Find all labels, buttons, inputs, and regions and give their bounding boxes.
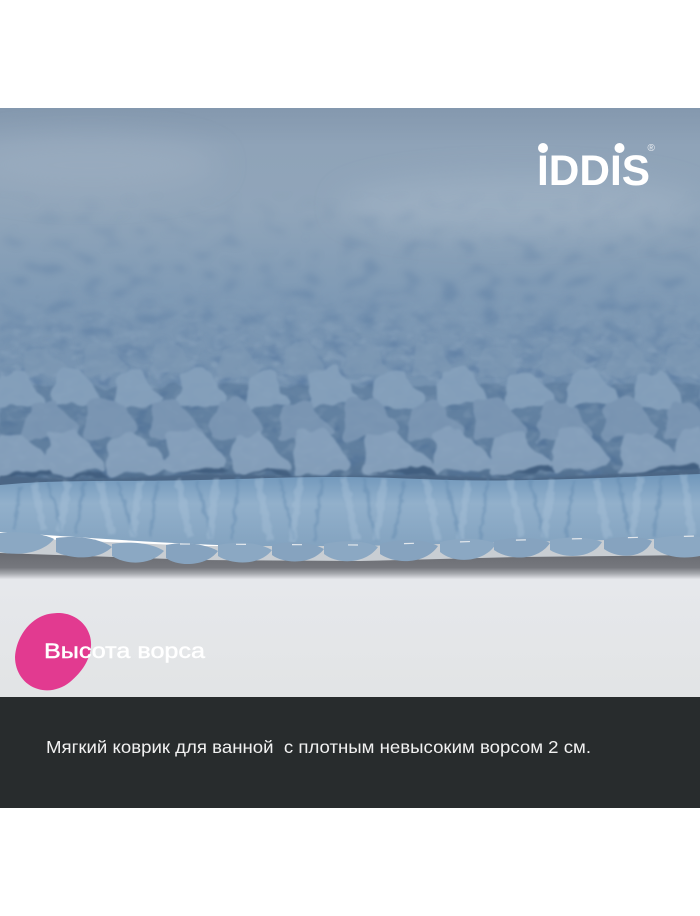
pile tufts: [0, 345, 700, 480]
infographic: [0, 108, 700, 808]
photo: bathroom rug close-up: [0, 108, 700, 697]
caption panel: [0, 697, 700, 808]
surface below the rug: [0, 550, 700, 697]
rug bead stitching: [0, 532, 700, 564]
logo: IDDIS: IDDIS: [537, 147, 650, 195]
rug bound edge: [0, 474, 700, 547]
rug pile: [0, 108, 700, 490]
caption text: Мягкий коврик для ванной с плотным невысоким ворсом 2 см.: [46, 737, 591, 757]
logo: IDDIS: ®: [648, 143, 656, 154]
pink blob: [15, 613, 91, 690]
heading: pile height: Высота ворса: [44, 640, 205, 663]
